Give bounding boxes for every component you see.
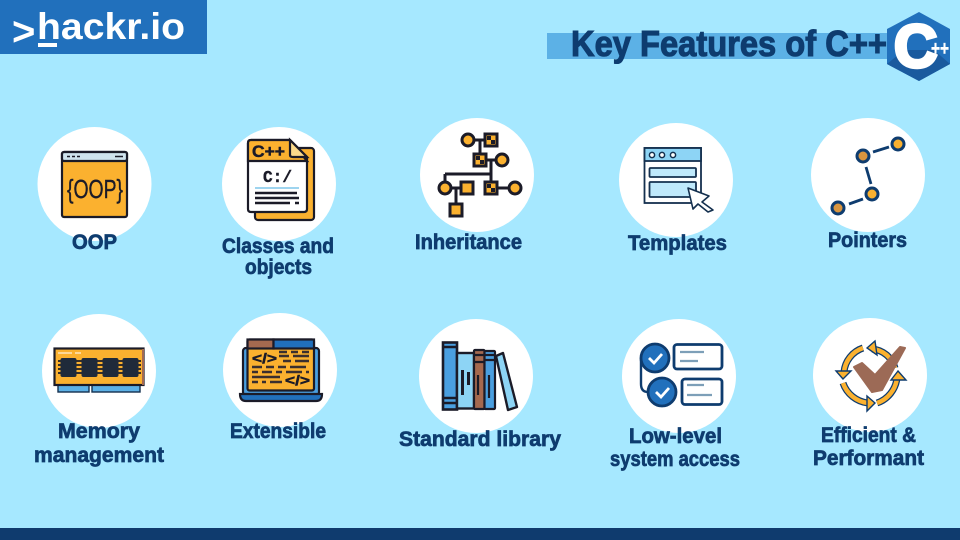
label bbox=[813, 424, 924, 470]
icon: connected points bbox=[832, 138, 904, 214]
label: Efficient & bbox=[821, 424, 916, 447]
icon: C++ hexagon logo: ++ bbox=[931, 38, 949, 60]
label: Memory bbox=[58, 420, 140, 443]
panel: Memory management bbox=[34, 314, 164, 467]
icon: C++ file: C++ bbox=[252, 142, 285, 161]
panel: Inheritance bbox=[415, 118, 534, 254]
footer bar bbox=[0, 528, 960, 540]
icon: check with cycle arrows bbox=[836, 341, 906, 411]
label bbox=[610, 425, 740, 471]
icon: C++ file bbox=[248, 140, 314, 220]
icon: C++ hexagon logo: C bbox=[894, 13, 937, 80]
panel: OOP bbox=[38, 127, 152, 254]
label: objects bbox=[245, 256, 312, 279]
label bbox=[34, 420, 164, 467]
panel: Standard library bbox=[399, 319, 561, 451]
title: Key Features of C++ bbox=[571, 23, 887, 64]
label: Templates bbox=[628, 232, 727, 255]
icon: laptop with code: </> bbox=[285, 372, 310, 388]
icon: C++ file: C:/ bbox=[263, 169, 292, 188]
logo: hackr.io: hackr.io bbox=[37, 6, 185, 47]
label: Low-level bbox=[629, 425, 722, 448]
panel: Extensible bbox=[223, 313, 337, 443]
logo: hackr.io bbox=[0, 0, 207, 54]
icon: inheritance tree bbox=[439, 134, 521, 216]
panel: Efficient & Performant bbox=[813, 318, 927, 470]
label: Pointers bbox=[828, 229, 907, 252]
title band bbox=[547, 33, 892, 59]
icon: C++ hexagon logo bbox=[887, 12, 950, 81]
icon: checklist bbox=[641, 344, 722, 406]
panel: Templates bbox=[619, 123, 733, 255]
label: system access bbox=[610, 448, 740, 471]
label bbox=[222, 235, 334, 279]
icon: laptop with code: </> bbox=[252, 350, 277, 366]
panel: Classes and objects bbox=[222, 127, 336, 279]
label: Performant bbox=[813, 447, 924, 470]
icon: books bbox=[443, 342, 517, 410]
icon: laptop with code bbox=[240, 340, 322, 401]
label: Standard library bbox=[399, 428, 561, 451]
label: Classes and bbox=[222, 235, 334, 258]
label: Extensible bbox=[230, 420, 326, 443]
icon: memory module bbox=[54, 348, 144, 392]
label: OOP bbox=[72, 231, 117, 254]
label: Inheritance bbox=[415, 231, 522, 254]
panel: Pointers bbox=[811, 118, 925, 252]
icon: template window with cursor bbox=[644, 148, 713, 212]
icon: OOP window: {OOP} bbox=[67, 174, 123, 204]
panel: Low-level system access bbox=[610, 319, 740, 471]
logo: hackr.io: > bbox=[12, 10, 35, 54]
label: management bbox=[34, 444, 164, 467]
